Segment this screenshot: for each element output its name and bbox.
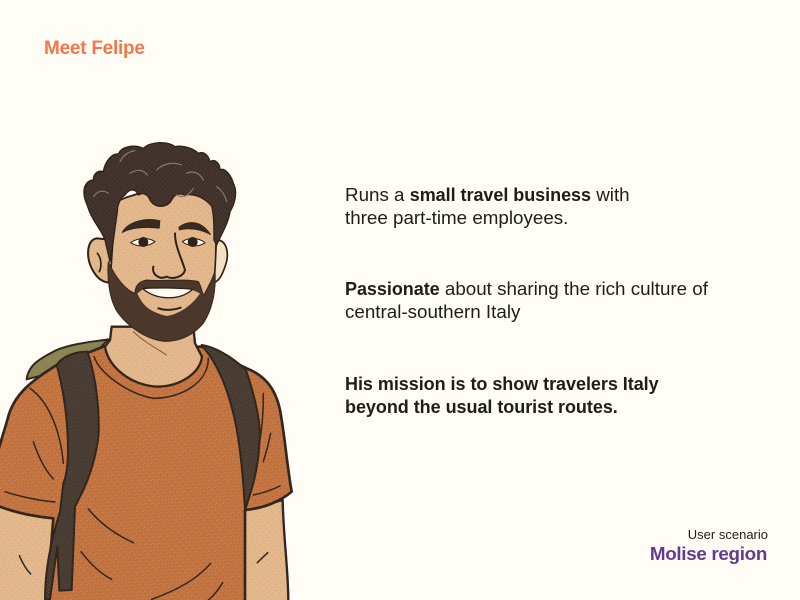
neck [105, 327, 202, 387]
title: Meet Felipe [44, 38, 145, 59]
body [0, 327, 292, 600]
backpack top [27, 339, 108, 379]
chin patch [137, 289, 200, 316]
eyebrow: left [122, 219, 160, 233]
beard [108, 262, 215, 341]
text block: business: Runs a small travel business with [345, 184, 630, 205]
text block: mission [345, 374, 659, 417]
head [84, 143, 236, 341]
text block: business: three part-time employees. [345, 207, 568, 228]
text block: mission: beyond the usual tourist routes. [345, 397, 618, 417]
text block: passion: Passionate about sharing the rich culture of [345, 278, 708, 299]
face [110, 191, 216, 339]
shirt collar and folds [5, 357, 280, 600]
arm: left [0, 505, 55, 600]
text block: mission: His mission is to show travelers Italy [345, 374, 659, 394]
t-shirt [0, 346, 292, 600]
footer label: user scenario: User scenario [688, 527, 768, 542]
backpack strap: left [45, 352, 99, 599]
ear: right [213, 240, 227, 283]
arm: right [243, 500, 288, 600]
footer label: region: Molise region [650, 543, 767, 564]
text block: business [345, 184, 630, 228]
curly hair [84, 143, 236, 262]
nose [153, 233, 185, 278]
ear: left [88, 238, 115, 283]
eye: left [131, 239, 155, 246]
text block: passion [345, 278, 708, 322]
backpack strap: right [202, 345, 260, 510]
mouth [143, 288, 193, 298]
eyebrow: right [179, 222, 211, 235]
text block: passion: central-southern Italy [345, 301, 520, 322]
eye: right [182, 239, 205, 246]
